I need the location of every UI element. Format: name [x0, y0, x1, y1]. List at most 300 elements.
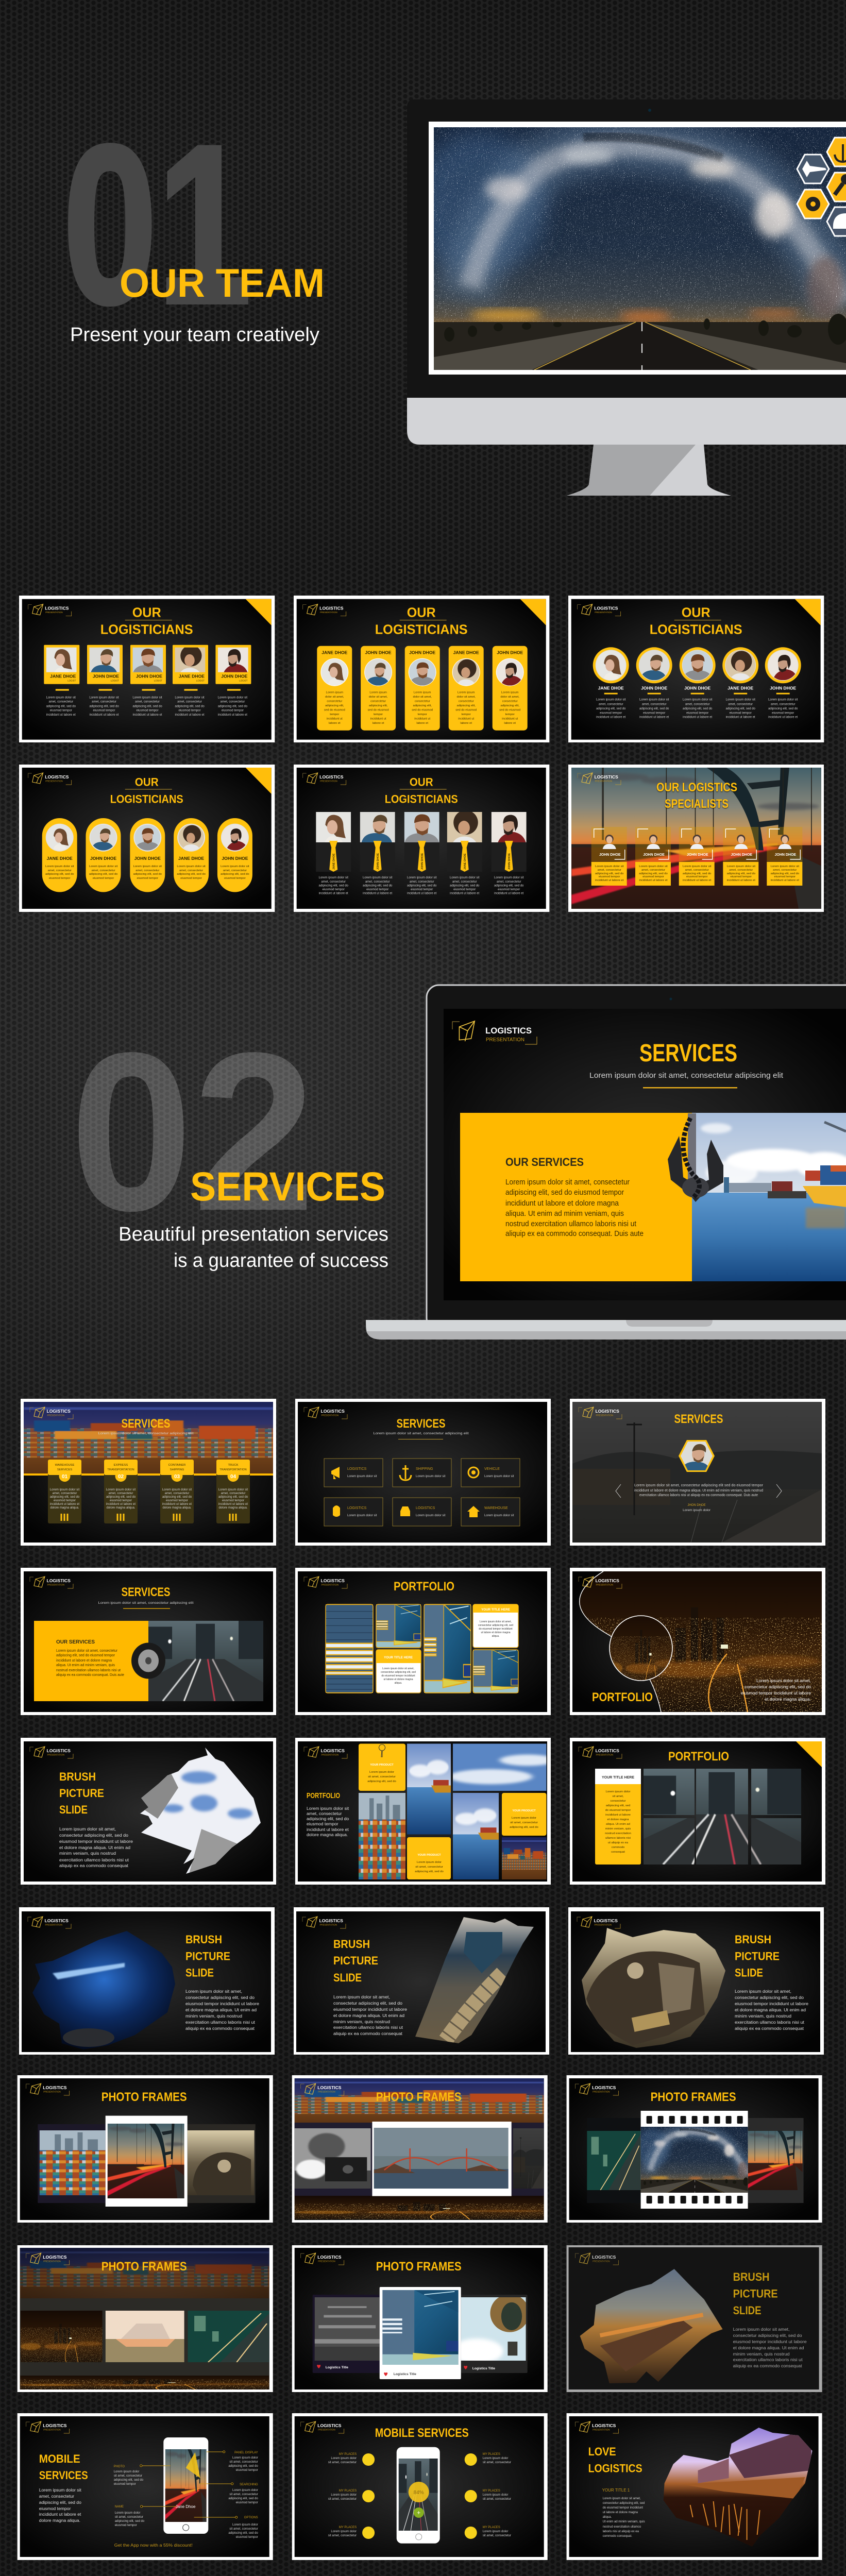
- body: [733, 2327, 807, 2368]
- title: PHOTO FRAMES: [101, 2090, 187, 2104]
- features right: MY PLACES: [483, 2453, 500, 2456]
- body: consectetur adipiscing elit, sed do: [185, 1995, 255, 2000]
- brush photo: [579, 1924, 728, 2050]
- member cards: amet, consectetur: [177, 701, 202, 704]
- logo: LOGISTICS: [45, 606, 69, 611]
- logo: LOGISTICS: [596, 1409, 619, 1414]
- member cards: consectetur: [459, 700, 474, 703]
- centre frame: [380, 2287, 461, 2379]
- logo: [577, 1917, 620, 1928]
- member cards: incididunt ut: [370, 718, 386, 721]
- member cards: adipiscing elit,: [325, 704, 344, 707]
- member cards: amet, consectetur: [92, 701, 116, 704]
- logo: LOGISTICS: [46, 1748, 71, 1753]
- callouts right: adipiscing elit, sed do: [228, 2532, 258, 2535]
- text card: incididunt ut labore: [605, 1814, 631, 1817]
- body: [735, 1989, 808, 2031]
- logo: PRESENTATION: [318, 2428, 335, 2431]
- member cards: tempor: [330, 713, 339, 716]
- tie cards: eiusmod tempor: [366, 888, 388, 891]
- pills: eiusmod tempor: [224, 877, 246, 880]
- brush slide 1: sky and towers: [21, 1738, 276, 1885]
- title: [650, 605, 742, 637]
- member cards: JOHN DHOE: [136, 674, 162, 679]
- member cards: JOHN DHOE: [93, 674, 119, 679]
- title: SPECIALISTS: [665, 797, 729, 811]
- features left: sit amet, consectetur: [328, 2498, 357, 2501]
- member cards: tempor: [505, 713, 515, 716]
- logo: [30, 1407, 73, 1419]
- title: LOGISTICIANS: [650, 622, 742, 637]
- member cards: consectetur: [415, 700, 430, 703]
- text card: nostrud exercitation: [605, 1832, 631, 1835]
- tie cards: eiusmod tempor: [323, 888, 345, 891]
- body: Lorem ipsum dolor sit amet,: [59, 1826, 116, 1832]
- pills: eiusmod tempor: [180, 877, 202, 880]
- callouts left: adipiscing elit, sed do: [114, 2479, 144, 2482]
- logo: LOGISTICS: [46, 1578, 71, 1583]
- tie cards: adipiscing elit, sed do: [407, 884, 437, 887]
- heart brush photo: [659, 2424, 817, 2550]
- logo: PRESENTATION: [322, 1414, 339, 1416]
- callouts left: sit amet, consectetur: [115, 2516, 143, 2519]
- tie cards: adipiscing elit, sed do: [494, 884, 524, 887]
- pills: Lorem ipsum dolor sit: [221, 865, 249, 868]
- member cards: LOGIST: [111, 680, 119, 682]
- service columns: CONTAINER: [168, 1464, 185, 1467]
- gallery: [326, 1604, 518, 1693]
- brush photo: [27, 1922, 181, 2050]
- specialist cards: eiusmod tempor: [599, 875, 620, 878]
- body: et dolore magna aliqua. Ut enim ad: [735, 2007, 806, 2012]
- logo: LOGISTICS: [320, 1409, 345, 1414]
- gallery captions: Lorem ipsum dolor sit amet,: [382, 1667, 414, 1670]
- logo: PRESENTATION: [596, 1753, 613, 1756]
- logo: PRESENTATION: [322, 1583, 339, 1586]
- text card: adipiscing elit, sed: [606, 1804, 630, 1807]
- member cards: sed do eiusmod: [499, 709, 520, 712]
- member cards: labore et: [329, 722, 341, 725]
- body: do eiusmod tempor incididunt: [603, 2506, 643, 2510]
- members: incididunt ut labore et: [596, 716, 626, 719]
- members: incididunt ut labore et: [768, 716, 798, 719]
- arrows: [616, 1484, 782, 1498]
- specialist cards: JOHN DHOE: [774, 853, 796, 857]
- logo: LOGISTICS: [596, 1578, 619, 1583]
- service columns: TRANSPORTATION: [107, 1468, 134, 1471]
- title: PHOTO FRAMES: [376, 2260, 462, 2274]
- pills: JANE DHOE: [178, 856, 204, 861]
- body: eiusmod tempor incididunt ut labore: [735, 2001, 808, 2006]
- subtitle: Present your team creatively: [70, 324, 319, 346]
- corner triangle: [520, 599, 546, 625]
- quote text: exercitation ullamco laboris nisi ut aliquip ex ea commodo consequat. Duis aute: [639, 1493, 758, 1497]
- heading: LOGISTICS: [588, 2462, 642, 2475]
- logo: LOGISTICS: [592, 2255, 616, 2260]
- service columns: eiusmod tempor: [54, 1499, 76, 1502]
- portfolio slide 4: street mosaic: [570, 1738, 825, 1885]
- body: consectetur adipiscing elit, sed do: [733, 2333, 802, 2338]
- member cards: JANE DHOE: [322, 650, 348, 655]
- specialist cards: eiusmod tempor: [686, 875, 708, 878]
- member cards: adipiscing elit, sed do: [175, 705, 205, 708]
- pills: eiusmod tempor: [137, 877, 158, 880]
- heading: BRUSH: [59, 1770, 96, 1783]
- members: eiusmod tempor: [600, 711, 622, 715]
- member cards: adipiscing elit, sed do: [218, 705, 248, 708]
- member cards: sed do eiusmod: [324, 709, 345, 712]
- body: eiusmod tempor incididunt ut labore: [733, 2339, 807, 2344]
- member cards: labore et: [504, 722, 516, 725]
- logo: LOGISTICS: [319, 1918, 343, 1923]
- title: LOGISTICIANS: [375, 622, 468, 637]
- text card: do eiusmod tempor: [605, 1809, 631, 1812]
- heading: PICTURE: [735, 1950, 780, 1963]
- body: minim veniam, quis nostrud: [59, 1851, 116, 1856]
- phone: 84%: [414, 2490, 424, 2496]
- services slide 3: testimonial over rail photo: [570, 1399, 825, 1546]
- features left: MY PLACES: [339, 2489, 357, 2493]
- service columns: amet, consectetur: [109, 1492, 133, 1495]
- service columns: EXPRESS: [114, 1464, 128, 1467]
- member cards: consectetur: [502, 700, 518, 703]
- member cards: eiusmod tempor: [50, 709, 72, 713]
- laptop title: [589, 1040, 784, 1088]
- body: [602, 2488, 645, 2538]
- gallery captions: ut labore et dolore magna: [384, 1678, 413, 1681]
- features right: sit amet, consectetur: [483, 2534, 511, 2537]
- gallery captions: aliqua.: [492, 1635, 499, 1638]
- member cards: incididunt ut labore et: [89, 714, 119, 717]
- tile captions: sit amet, consectetur: [415, 1866, 443, 1869]
- side text: eiusmod tempor: [307, 1821, 339, 1826]
- logo: [301, 2083, 344, 2095]
- service columns: Lorem ipsum dolor sit: [162, 1488, 192, 1492]
- body: Lorem ipsum dolor sit: [39, 2487, 81, 2493]
- tile captions: adipiscing elit, sed do: [510, 1826, 538, 1829]
- member cards: tempor: [418, 713, 427, 716]
- tie cards: eiusmod tempor: [453, 888, 476, 891]
- logo: LOGISTICS: [319, 606, 344, 611]
- tie cards: JOHN DHOE: [421, 853, 424, 870]
- tile captions: adipiscing elit, sed do: [367, 1780, 396, 1783]
- pills: Lorem ipsum dolor sit: [89, 865, 118, 868]
- service columns: dolore magna aliqua.: [162, 1506, 192, 1510]
- subtitle: [119, 1224, 388, 1272]
- logo: PRESENTATION: [43, 2260, 61, 2262]
- gallery captions: YOUR TITLE HERE: [481, 1608, 510, 1612]
- specialist cards: Lorem ipsum dolor sit: [595, 865, 624, 868]
- tie cards: incididunt ut labore et: [407, 892, 437, 895]
- text: eiusmod tempor incididunt ut labore: [741, 1690, 811, 1696]
- heading: [588, 2445, 642, 2475]
- service columns: 01: [62, 1474, 67, 1480]
- member cards: Lorem ipsum dolor sit: [89, 696, 119, 699]
- tie cards: adipiscing elit, sed do: [319, 884, 349, 887]
- member cards: Lorem ipsum dolor sit: [132, 696, 162, 699]
- tie cards: amet, consectetur: [365, 880, 390, 884]
- tile captions: sit amet, consectetur: [368, 1775, 396, 1778]
- tie cards: incididunt ut labore et: [319, 892, 348, 895]
- logo: LOGISTICS: [595, 774, 618, 779]
- body: et dolore magna aliqua. Ut enim ad: [333, 2013, 404, 2018]
- body: [185, 1989, 259, 2031]
- member cards: Lorem ipsum dolor sit: [218, 696, 247, 699]
- member cards: JANE DHOE: [179, 674, 205, 679]
- brush slide 4: vintage truck: [568, 1907, 824, 2055]
- service columns: eiusmod tempor: [166, 1499, 188, 1502]
- portfolio slide 3: mosaic: [295, 1738, 556, 1885]
- tie cards: JOHN DHOE: [377, 853, 380, 870]
- title: [385, 776, 458, 806]
- members: Lorem ipsum dolor sit: [683, 699, 713, 702]
- members: JANE DHOE: [727, 686, 754, 691]
- title: SERVICES: [674, 1412, 723, 1426]
- gallery captions: consectetur adipiscing elit, sed: [478, 1624, 513, 1627]
- pills: adipiscing elit, sed do: [89, 873, 117, 876]
- member cards: labore et: [416, 722, 428, 725]
- member cards: LOGIST: [196, 680, 205, 682]
- member cards: LOGIST: [154, 680, 162, 682]
- service columns: eiusmod tempor: [110, 1499, 132, 1502]
- features right: sit amet, consectetur: [483, 2498, 511, 2501]
- text card: commodo: [612, 1846, 624, 1849]
- corner triangle: [246, 599, 272, 625]
- callouts left: Lorem ipsum dolor: [115, 2512, 140, 2515]
- member cards: dolor sit amet,: [456, 696, 476, 699]
- specialist cards: JOHN DHOE: [599, 853, 621, 857]
- service columns: adipiscing elit, sed do: [218, 1496, 248, 1499]
- members: Lorem ipsum dolor sit: [639, 699, 669, 702]
- quote text: [634, 1483, 764, 1512]
- title: PHOTO FRAMES: [101, 2260, 187, 2274]
- tile captions: YOUR PRODUCT: [370, 1764, 394, 1767]
- body: exercitation ullamco laboris nisi ut: [733, 2357, 803, 2362]
- member cards: dolor sit amet,: [325, 696, 344, 699]
- specialist cards: Lorem ipsum dolor sit: [727, 865, 755, 868]
- yellow panel: nostrud exercitation ullamco laboris nisi ut: [505, 1219, 637, 1228]
- member cards: tempor: [462, 713, 471, 716]
- gallery captions: aliqua.: [395, 1682, 402, 1685]
- callouts right: eiusmod tempor: [236, 2469, 258, 2472]
- service columns: amet, consectetur: [53, 1492, 77, 1495]
- body: consectetur adipiscing elit, sed do: [735, 1995, 804, 2000]
- callouts right: [194, 2451, 258, 2539]
- title: SERVICES: [397, 1417, 445, 1431]
- tie cards: incididunt ut labore et: [494, 892, 524, 895]
- specialist cards: incididunt ut labore et: [727, 879, 755, 882]
- title: [98, 1417, 194, 1439]
- logo: [579, 1577, 622, 1588]
- logo: [301, 2421, 344, 2433]
- member cards: incididunt ut: [414, 718, 431, 721]
- body: minim veniam, quis nostrud: [333, 2019, 390, 2024]
- heading: PICTURE: [733, 2287, 778, 2300]
- logo: [302, 1917, 346, 1928]
- tie cards: [316, 810, 527, 895]
- gallery captions: Lorem ipsum dolor sit amet,: [480, 1620, 512, 1623]
- side text: [307, 1791, 349, 1837]
- title: [373, 1417, 469, 1439]
- harbour photo: [692, 1113, 846, 1281]
- brush photo: [577, 2266, 726, 2387]
- member cards: amet, consectetur: [135, 701, 160, 704]
- heading: PICTURE: [59, 1787, 104, 1800]
- body: aliquip ex ea commodo consequat: [59, 1863, 129, 1868]
- body: dolore magna aliqua.: [39, 2518, 80, 2523]
- specialist cards: Lorem ipsum dolor sit: [639, 865, 668, 868]
- member cards: labore et: [373, 722, 384, 725]
- logo: [579, 1407, 622, 1419]
- logo: LOGISTICS: [320, 1748, 345, 1753]
- logo: LOGISTICS: [317, 2423, 342, 2428]
- body: eiusmod tempor: [39, 2506, 71, 2511]
- phone: +: [417, 2509, 420, 2516]
- body: consectetur adipiscing elit, sed do: [333, 2001, 402, 2006]
- yellow panel: nostrud exercitation ullamco laboris nisi ut: [56, 1668, 121, 1672]
- logo: LOGISTICS: [485, 1026, 532, 1036]
- heading: SERVICES: [39, 2469, 88, 2482]
- title: OUR: [132, 605, 161, 620]
- members: JOHN DHOE: [641, 686, 668, 691]
- features left: Lorem ipsum dolor: [331, 2530, 357, 2533]
- pills: amet, consectetur: [91, 869, 115, 872]
- service columns: eiusmod tempor: [222, 1499, 244, 1502]
- tie cards: amet, consectetur: [321, 880, 346, 884]
- member cards: Lorem ipsum dolor sit: [46, 696, 76, 699]
- features right: MY PLACES: [483, 2526, 500, 2529]
- member cards: incididunt ut labore et: [132, 714, 162, 717]
- members: incididunt ut labore et: [726, 716, 755, 719]
- service columns: 02: [118, 1474, 124, 1480]
- body: Ut enim ad minim veniam, quis: [603, 2520, 645, 2523]
- member cards: adipiscing elit, sed do: [46, 705, 76, 708]
- logo: PRESENTATION: [43, 2090, 61, 2093]
- body: aliqua.: [603, 2516, 612, 2519]
- specialist cards: Lorem ipsum dolor sit: [771, 865, 799, 868]
- body: aliquip ex ea commodo consequat: [333, 2031, 403, 2036]
- member cards: Lorem ipsum: [458, 691, 475, 694]
- member cards: Lorem ipsum: [501, 691, 519, 694]
- logo: [576, 2421, 619, 2433]
- title: PHOTO FRAMES: [651, 2090, 736, 2104]
- tie cards: incididunt ut labore et: [450, 892, 480, 895]
- yellow panel: Lorem ipsum dolor sit amet, consectetur: [505, 1178, 630, 1187]
- team slide 4: pill cards: [19, 765, 275, 912]
- logo: LOGISTICS: [43, 2085, 67, 2090]
- callouts right: Lorem ipsum dolor: [232, 2489, 258, 2492]
- service columns: SERVICES: [57, 1468, 72, 1471]
- logo: PRESENTATION: [595, 779, 612, 782]
- title: PORTFOLIO: [394, 1580, 454, 1594]
- member cards: labore et: [460, 722, 472, 725]
- team slide 5: ties: [294, 765, 549, 912]
- tile captions: Lorem ipsum dolor: [417, 1861, 442, 1864]
- tie cards: Lorem ipsum dolor sit: [407, 876, 437, 879]
- title: LOGISTICIANS: [100, 622, 193, 637]
- photo frames slide 5: polaroids: [292, 2245, 548, 2392]
- member cards: adipiscing elit,: [500, 704, 519, 707]
- body: eiusmod tempor incididunt ut labore: [185, 2001, 259, 2006]
- pills: JANE DHOE: [47, 856, 73, 861]
- body: et dolore magna aliqua. Ut enim ad: [185, 2007, 257, 2012]
- service columns: Lorem ipsum dolor sit: [218, 1488, 248, 1492]
- mosaic tiles: [359, 1743, 556, 1879]
- centre frame: Logistics Title: [394, 2372, 416, 2376]
- gallery captions: do eiusmod tempor incididunt: [479, 1628, 513, 1631]
- yellow panel: Lorem ipsum dolor sit amet, consectetur: [56, 1648, 118, 1653]
- body: nostrud exercitation ullamco: [603, 2526, 641, 2529]
- yellow panel: incididunt ut labore et dolore magna: [505, 1199, 619, 1208]
- member cards: [44, 645, 251, 717]
- logo: PRESENTATION: [486, 1037, 524, 1043]
- members: incididunt ut labore et: [683, 716, 713, 719]
- title: OUR: [135, 776, 159, 788]
- body: eiusmod tempor incididunt ut labore: [333, 2007, 407, 2012]
- logo: [26, 2083, 70, 2095]
- logo: [26, 2421, 70, 2433]
- text card: ullamco laboris nisi: [605, 1837, 631, 1840]
- service columns: 04: [230, 1474, 236, 1480]
- icon boxes: WAREHOUSE: [484, 1506, 508, 1510]
- member cards: adipiscing elit, sed do: [89, 705, 119, 708]
- callouts left: adipiscing elit, sed do: [115, 2520, 145, 2523]
- callouts right: SEARCHING: [240, 2483, 258, 2486]
- brush slide 5: rail yard, grey frame: [567, 2245, 822, 2392]
- services slide 4: yellow panel with tyre: [21, 1568, 276, 1715]
- city photo: [572, 1571, 822, 1712]
- heading: SLIDE: [333, 1971, 362, 1984]
- logo: PRESENTATION: [596, 1414, 613, 1416]
- logo: [28, 1917, 71, 1928]
- logo: [576, 2253, 619, 2265]
- heading: [185, 1933, 230, 1979]
- heading: BRUSH: [185, 1933, 222, 1946]
- brush slide 2: blue bridge: [19, 1907, 275, 2055]
- callouts right: adipiscing elit, sed do: [228, 2497, 258, 2500]
- member cards: amet, consectetur: [48, 701, 73, 704]
- specialist cards: incididunt ut labore et: [639, 879, 668, 882]
- service columns: TRANSPORTATION: [219, 1468, 247, 1471]
- members: amet, consectetur: [642, 703, 667, 706]
- features left: sit amet, consectetur: [328, 2461, 357, 2464]
- member cards: adipiscing elit,: [413, 704, 432, 707]
- callouts left: sit amet, consectetur: [114, 2475, 142, 2478]
- callouts left: eiusmod tempor: [115, 2524, 137, 2527]
- body: exercitation ullamco laboris nisi ut: [735, 2020, 805, 2025]
- logo: PRESENTATION: [320, 779, 337, 782]
- member cards: sed do eiusmod: [412, 709, 433, 712]
- yellow panel: aliquip ex ea commodo consequat. Duis aute: [56, 1672, 124, 1677]
- member cards: [317, 646, 528, 731]
- title: OUR: [410, 776, 433, 788]
- yellow panel: adipiscing elit, sed do eiusmod tempor: [505, 1188, 624, 1197]
- title: SERVICES: [122, 1585, 170, 1599]
- member cards: incididunt ut labore et: [46, 714, 76, 717]
- member cards: Lorem ipsum: [369, 691, 387, 694]
- specialist cards: adipiscing elit, sed do: [683, 872, 711, 875]
- callouts right: OPTIONS: [244, 2516, 258, 2519]
- member cards: adipiscing elit,: [369, 704, 388, 707]
- service columns: incididunt ut labore et: [106, 1503, 136, 1506]
- member cards: dolor sit amet,: [500, 696, 519, 699]
- yellow panel: [34, 1621, 148, 1701]
- logo: [578, 773, 621, 785]
- logo: PRESENTATION: [322, 1753, 339, 1756]
- member cards: JOHN DHOE: [497, 650, 523, 655]
- logo: LOGISTICS: [320, 1578, 345, 1583]
- members: Lorem ipsum dolor sit: [596, 699, 626, 702]
